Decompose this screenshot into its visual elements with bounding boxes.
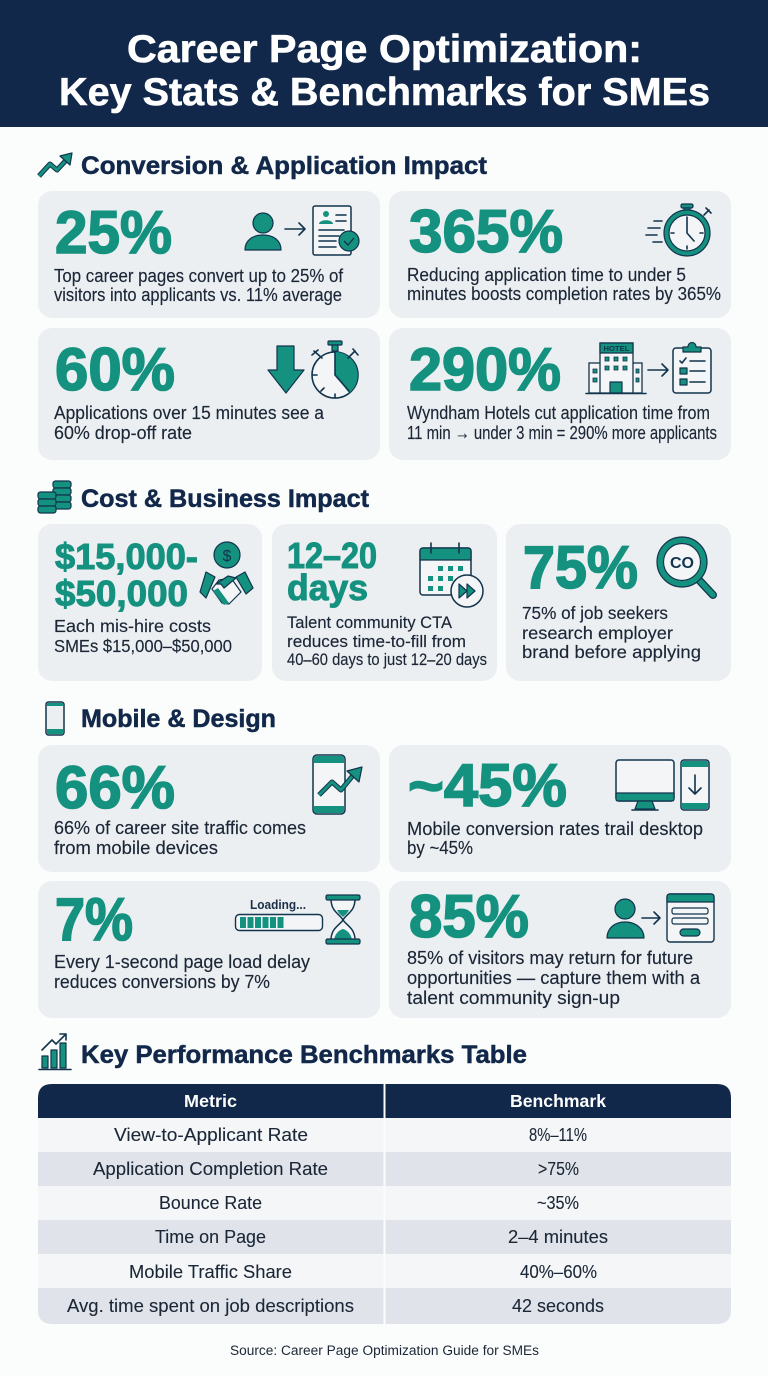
source note: Source: Career Page Optimization Guide for SMEs [230, 1343, 539, 1358]
panel: 60% drop-off [38, 328, 380, 460]
description: 66%: from mobile devices [54, 837, 218, 858]
table row: Time on Page [155, 1227, 608, 1247]
table row: Time on Page: Time on Page [155, 1227, 266, 1247]
description: time to fill: 40–60 days to just 12–20 days [287, 651, 487, 669]
icon: loading bar and hourglass: Loading... [250, 898, 306, 912]
description: time to fill: reduces time-to-fill from [287, 633, 466, 651]
description: 85%: talent community sign-up [407, 987, 620, 1008]
icon: calendar with fast-forward [420, 543, 483, 607]
icon: loading bar and hourglass [236, 895, 360, 944]
table row: View-to-Applicant Rate: 8%–11% [529, 1125, 587, 1145]
panel: 290% Wyndham [389, 328, 731, 460]
description: 365%: Reducing application time to under 5 [407, 264, 686, 285]
description: 7% [54, 951, 311, 992]
table row: Application Completion Rate: >75% [538, 1159, 579, 1179]
description: 60% [54, 402, 325, 443]
panel: ~45% mobile gap [389, 745, 731, 872]
table: key performance benchmarks [38, 1084, 731, 1324]
description: 60%: Applications over 15 minutes see a [54, 402, 325, 423]
panel: 365% completion [389, 191, 731, 318]
icon: person to application [245, 206, 359, 255]
description: 66%: 66% of career site traffic comes [54, 817, 306, 838]
table row: Application Completion Rate: Application Completion Rate [93, 1159, 328, 1179]
panel: 365% completion: 365% [409, 198, 563, 265]
heading: Key Performance Benchmarks Table [39, 1034, 527, 1070]
panel: mis-hire cost [38, 524, 262, 681]
table header row: Metric [184, 1091, 237, 1111]
table row: View-to-Applicant Rate [114, 1125, 587, 1145]
panel: 60% drop-off: 60% [55, 336, 175, 403]
icon: dollar coin and handshake [200, 542, 253, 605]
description: 25%: visitors into applicants vs. 11% average [54, 284, 342, 305]
header banner with title: Key Stats & Benchmarks for SMEs [59, 71, 710, 114]
description: 85%: opportunities — capture them with a [407, 967, 701, 988]
description: 290% [407, 402, 717, 443]
icon: hotel to checklist [586, 342, 711, 394]
description: 365%: minutes boosts completion rates by 365% [407, 283, 721, 304]
header banner with title [0, 0, 768, 127]
table row: Time on Page: 2–4 minutes [508, 1227, 608, 1247]
table row: Application Completion Rate [93, 1159, 579, 1179]
description: time to fill [287, 614, 487, 669]
table row: Bounce Rate [159, 1193, 579, 1213]
description: 365% [407, 264, 721, 304]
panel: 85% returning visitors [389, 881, 731, 1018]
panel: 66% mobile traffic [38, 745, 380, 872]
heading: Conversion & Application Impact: Conversion & Application Impact [81, 152, 488, 180]
panel: 7% page load: 7% [55, 886, 133, 953]
description: 290%: Wyndham Hotels cut application time from [407, 402, 710, 423]
header banner with title: Career Page Optimization: [127, 28, 642, 71]
description: 85%: 85% of visitors may return for future [407, 947, 693, 968]
heading: Cost & Business Impact: Cost & Business Impact [81, 485, 370, 513]
icon: bar chart with arrow [39, 1034, 71, 1070]
panel: employer brand: 75% [523, 534, 638, 601]
table row: View-to-Applicant Rate: View-to-Applicant Rate [114, 1125, 308, 1145]
icon: person to sign-up form [607, 894, 714, 942]
icon: down arrow and stopwatch [268, 341, 358, 398]
icon: dollar coin and handshake: $ [222, 548, 232, 565]
description: 7%: Every 1-second page load delay [54, 951, 311, 972]
description: mis-hire [54, 616, 232, 656]
description: 25% [54, 265, 344, 305]
table header row: Benchmark [510, 1091, 606, 1111]
description: employer brand: research employer [522, 623, 673, 643]
description: employer brand: brand before applying [522, 642, 701, 662]
stat: $15,000-$50,000: $50,000 [55, 573, 188, 614]
description: employer brand: 75% of job seekers [522, 603, 668, 623]
stat: 12-20 days [287, 535, 377, 608]
description: ~45% [407, 818, 703, 858]
description: 60%: 60% drop-off rate [54, 422, 192, 443]
panel: time to fill [272, 524, 497, 681]
panel: employer brand [506, 524, 731, 681]
stat: 12-20 days: 12–20 [287, 535, 377, 576]
icon: coin stacks [38, 481, 71, 513]
icon: trend arrow [39, 153, 72, 176]
panel: 7% page load [38, 881, 380, 1018]
table row: Bounce Rate: Bounce Rate [159, 1193, 262, 1213]
icon: stopwatch with speed lines [646, 204, 711, 256]
icon: magnifier with CO [657, 537, 713, 595]
stat: $15,000-$50,000 [55, 536, 198, 614]
stat: 12-20 days: days [287, 567, 368, 608]
panel: 25% conversion [38, 191, 380, 318]
table row: Mobile Traffic Share [129, 1262, 597, 1282]
table row: Avg. time spent on job descriptions: 42 seconds [512, 1296, 604, 1316]
description: employer brand [522, 603, 701, 662]
table row: Bounce Rate: ~35% [537, 1193, 579, 1213]
description: time to fill: Talent community CTA [287, 614, 452, 632]
description: ~45%: by ~45% [407, 837, 473, 858]
description: 25%: Top career pages convert up to 25% of [54, 265, 344, 286]
panel: 66% mobile traffic: 66% [55, 754, 175, 821]
table row: Mobile Traffic Share: 40%–60% [520, 1262, 597, 1282]
stat: $15,000-$50,000: $15,000- [55, 536, 198, 577]
description: mis-hire: Each mis-hire costs [54, 616, 211, 636]
table header row [184, 1091, 606, 1111]
table row: Avg. time spent on job descriptions: Avg. time spent on job descriptions [67, 1296, 354, 1316]
icon: hotel to checklist: HOTEL [604, 346, 630, 353]
description: 7%: reduces conversions by 7% [54, 971, 270, 992]
icon: phone [46, 702, 64, 735]
heading: Key Performance Benchmarks Table: Key Performance Benchmarks Table [81, 1041, 527, 1069]
description: 66% [54, 817, 306, 858]
icon: desktop and phone [616, 760, 709, 810]
panel: 85% returning visitors: 85% [409, 883, 529, 950]
description: mis-hire: SMEs $15,000–$50,000 [54, 636, 232, 656]
heading: Mobile & Design: Mobile & Design [81, 705, 276, 733]
table row: Mobile Traffic Share: Mobile Traffic Share [129, 1262, 292, 1282]
panel: 290% Wyndham: 290% [409, 336, 561, 403]
table row: Avg. time spent on job descriptions [67, 1296, 604, 1316]
panel: 25% conversion: 25% [55, 199, 172, 266]
icon: magnifier with CO: CO [670, 555, 694, 572]
description: ~45%: Mobile conversion rates trail desktop [407, 818, 703, 839]
description: 85% [407, 947, 701, 1008]
icon: phone with rising arrow [313, 755, 362, 814]
panel: ~45% mobile gap: ~45% [408, 752, 567, 819]
